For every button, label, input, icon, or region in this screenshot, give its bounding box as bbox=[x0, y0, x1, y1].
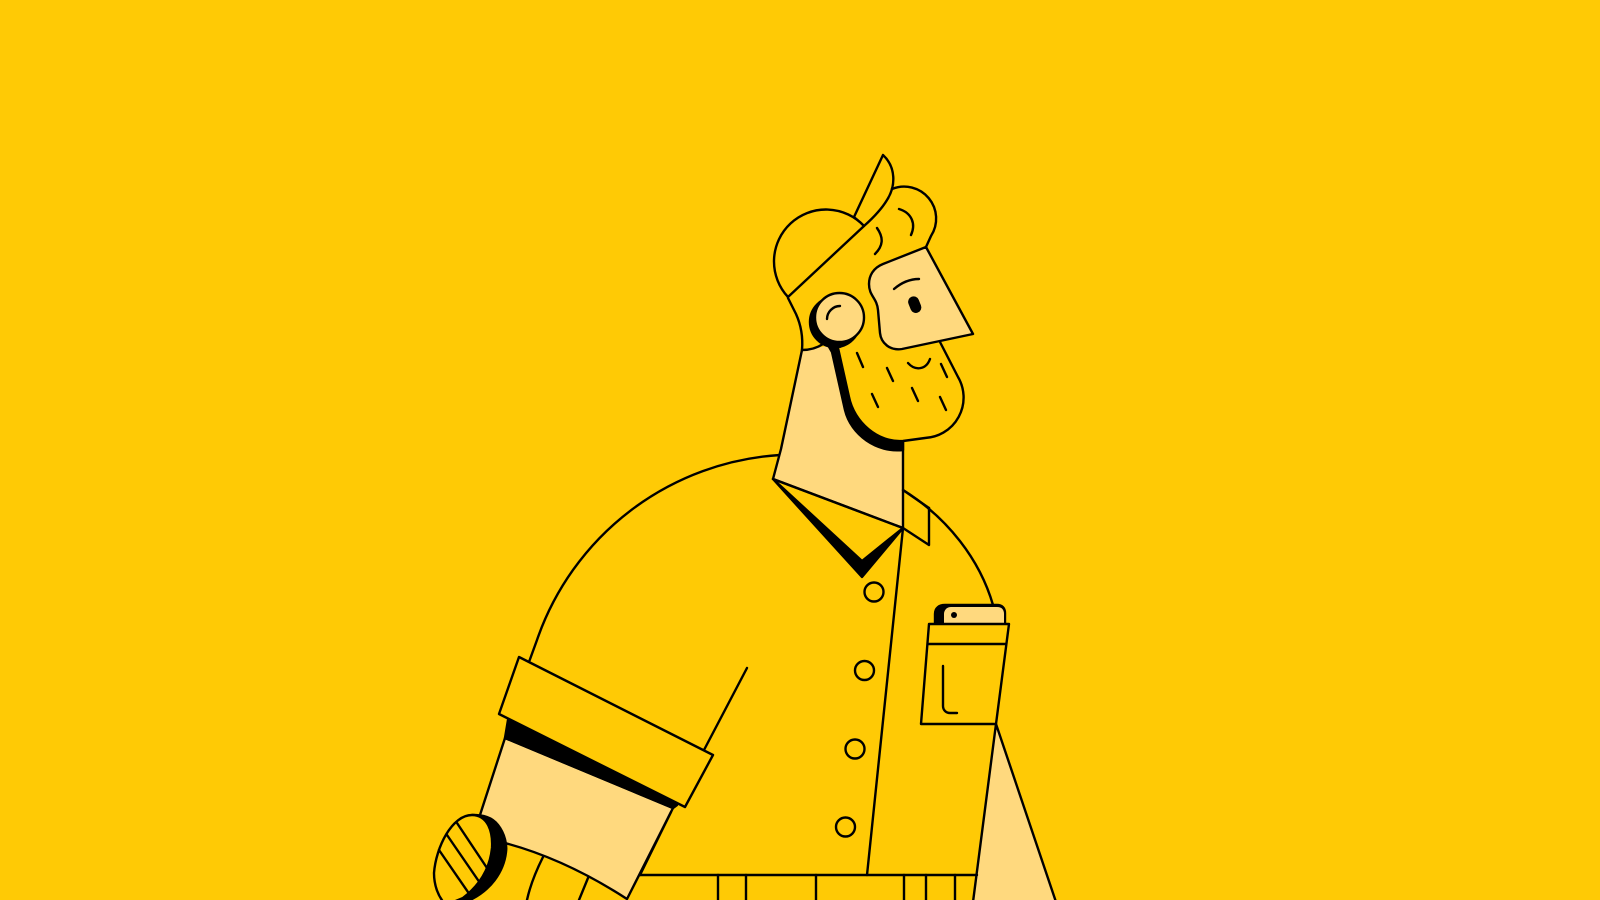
sleeve cuff bbox=[499, 657, 713, 807]
ear bbox=[802, 293, 864, 350]
hair bbox=[875, 187, 936, 254]
sleeve shadow bbox=[505, 720, 677, 808]
hand bbox=[434, 815, 506, 900]
waistband and belt lines bbox=[640, 875, 977, 900]
pocket bbox=[921, 624, 1009, 724]
cap bbox=[774, 155, 893, 297]
forearm bbox=[480, 738, 673, 899]
eyebrow bbox=[894, 279, 919, 289]
eye bbox=[906, 295, 923, 315]
back of head bbox=[788, 298, 802, 350]
face bbox=[869, 247, 973, 349]
beard bbox=[828, 342, 964, 450]
shirt torso outline bbox=[529, 455, 993, 875]
neck bbox=[773, 345, 903, 528]
right arm bbox=[973, 724, 1056, 900]
shirt buttons bbox=[836, 582, 884, 836]
phone bbox=[935, 605, 1005, 624]
collar bbox=[773, 479, 929, 577]
forearm under lines bbox=[527, 812, 671, 900]
